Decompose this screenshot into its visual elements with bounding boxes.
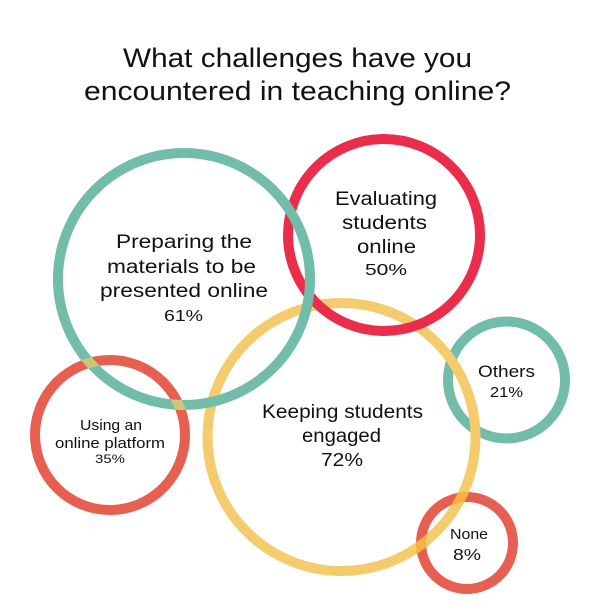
label: evaluating students online 50%: Evaluating bbox=[335, 189, 437, 210]
circle: preparing the materials bbox=[58, 153, 310, 405]
label: evaluating students online 50%: 50% bbox=[365, 262, 407, 279]
label: using an online platform 35%: Using an bbox=[80, 417, 142, 434]
label: using an online platform 35% bbox=[55, 417, 165, 466]
label: preparing the materials 61%: materials to be bbox=[107, 257, 256, 278]
circle: keeping students engaged bbox=[208, 303, 476, 571]
label: evaluating students online 50% bbox=[335, 189, 437, 279]
label: preparing the materials 61%: presented online bbox=[100, 281, 268, 302]
label: preparing the materials 61%: 61% bbox=[164, 308, 203, 325]
circle: using an online platform bbox=[35, 360, 185, 510]
circle: evaluating students online bbox=[288, 139, 480, 331]
title: What challenges have you bbox=[123, 43, 472, 73]
circle: none bbox=[421, 497, 513, 589]
title bbox=[84, 43, 511, 106]
label: using an online platform 35%: 35% bbox=[95, 452, 125, 466]
label: none 8%: 8% bbox=[453, 547, 481, 564]
label: preparing the materials 61%: Preparing the bbox=[116, 232, 252, 253]
label: others 21%: Others bbox=[478, 362, 535, 381]
label: keeping students engaged 72%: 72% bbox=[321, 450, 363, 470]
overlap: none and engaged rings bbox=[416, 492, 469, 554]
title: encountered in teaching online? bbox=[84, 76, 511, 106]
label: others 21% bbox=[478, 362, 535, 401]
label: keeping students engaged 72% bbox=[262, 402, 423, 470]
overlap: platform and materials rings bbox=[82, 357, 186, 410]
label: evaluating students online 50%: students bbox=[342, 213, 427, 234]
label: evaluating students online 50%: online bbox=[357, 237, 416, 258]
label: others 21%: 21% bbox=[490, 384, 523, 401]
circle: others bbox=[448, 322, 565, 438]
label: none 8%: None bbox=[450, 526, 488, 543]
label: using an online platform 35%: online platform bbox=[55, 435, 165, 452]
label: none 8% bbox=[450, 526, 488, 564]
label: keeping students engaged 72%: engaged bbox=[302, 426, 381, 447]
label: preparing the materials 61% bbox=[100, 232, 268, 325]
label: keeping students engaged 72%: Keeping students bbox=[262, 402, 423, 423]
